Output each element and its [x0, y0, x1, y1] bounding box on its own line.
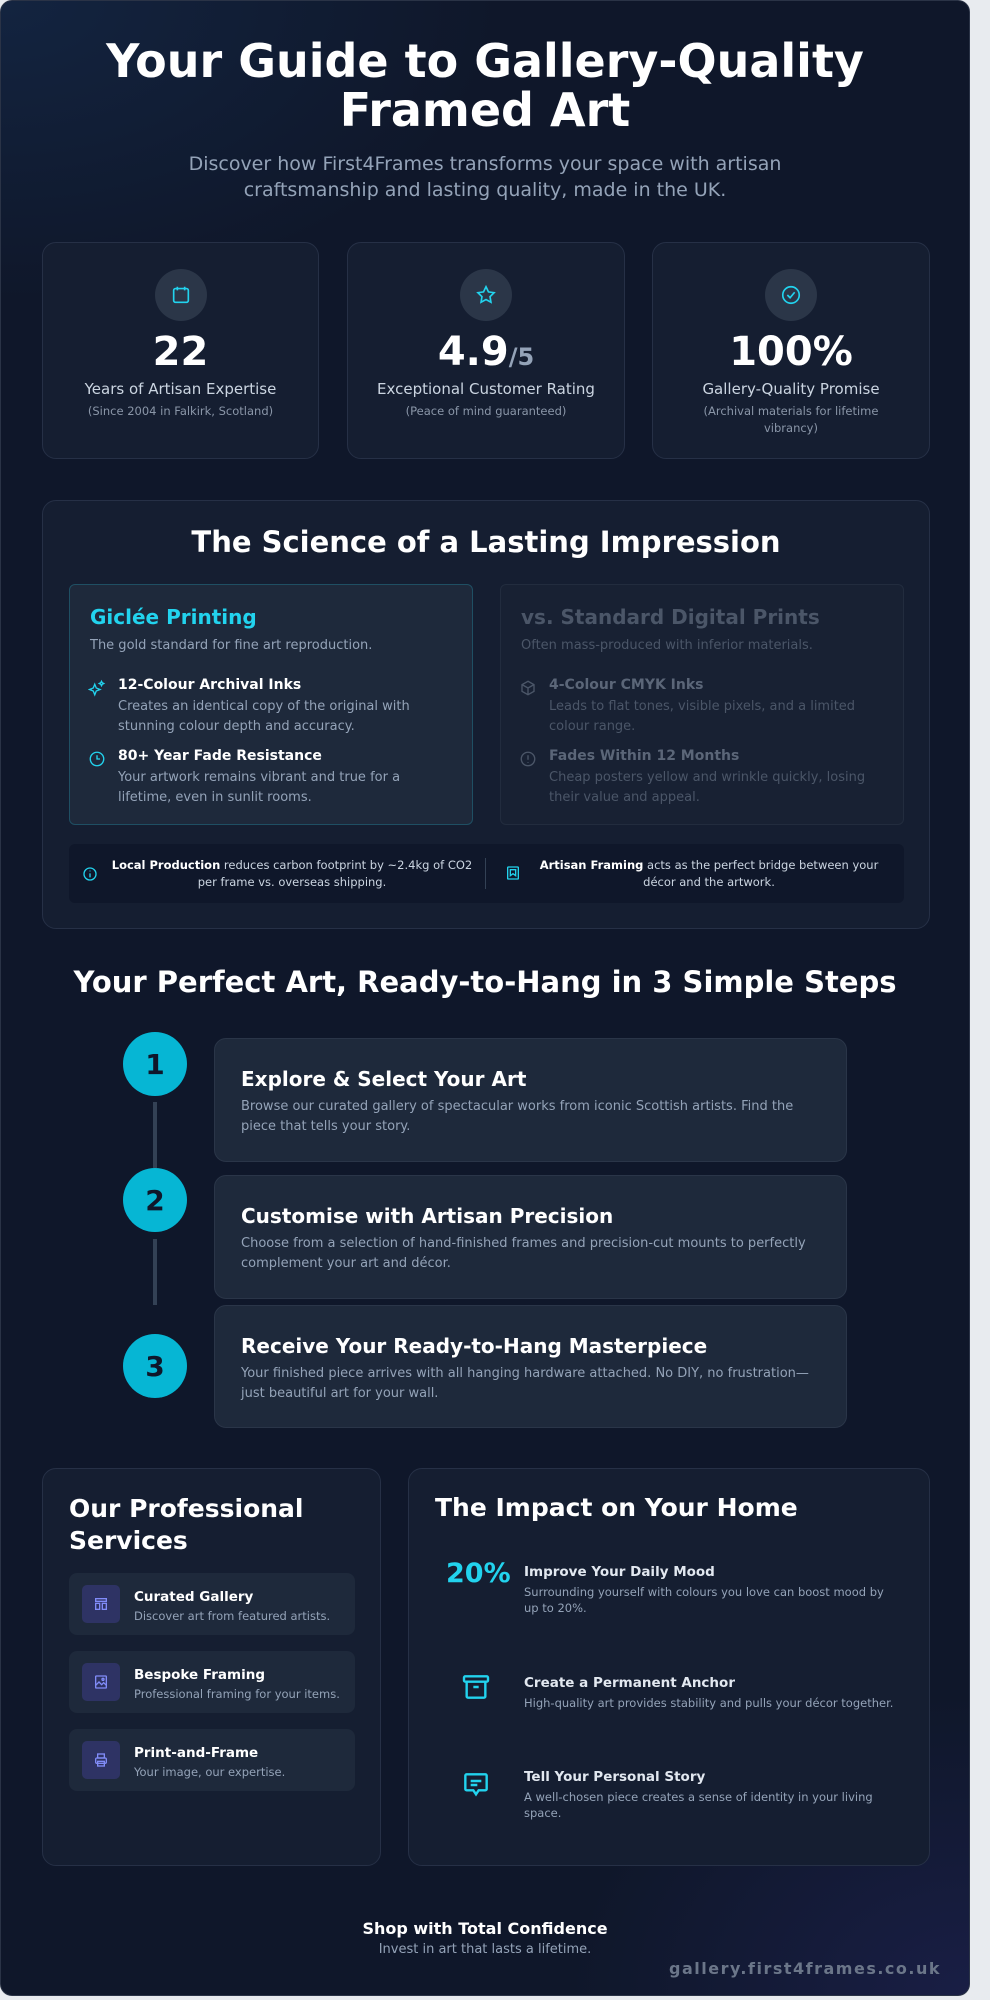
service: framing — [69, 1651, 355, 1713]
heading: steps: Your Perfect Art, Ready-to-Hang in 3 Simple Steps — [73, 965, 897, 999]
strip: local & framing: Local Production reduces carbon footprint by ~2.4kg of CO2 per frame vs. overseas shipping. — [112, 858, 472, 889]
title — [106, 34, 864, 137]
stat card: promise — [652, 242, 930, 459]
subtitle: craftsmanship and lasting quality, made in the UK. — [244, 179, 726, 201]
subtitle: Discover how First4Frames transforms your space with artisan — [189, 153, 781, 175]
stat card: years: (Since 2004 in Falkirk, Scotland) — [88, 404, 273, 418]
step 1 card: Browse our curated gallery of spectacular works from iconic Scottish artists. Find the piece that tells your story. — [241, 1099, 793, 1134]
impact: story: A well-chosen piece creates a sense of identity in your living space. — [524, 1790, 873, 1820]
step 1 card — [214, 1038, 847, 1162]
service: gallery — [69, 1573, 355, 1635]
service: gallery: Discover art from featured artists. — [134, 1609, 330, 1623]
title: Your Guide to Gallery-Quality — [106, 34, 864, 88]
step 1 circle — [123, 1032, 187, 1096]
box: standard: Often mass-produced with inferior materials. — [521, 638, 813, 653]
heading: impact: The Impact on Your Home — [435, 1493, 798, 1522]
service: print — [69, 1729, 355, 1791]
service: framing: Bespoke Framing — [134, 1667, 265, 1683]
item: fade: Your artwork remains vibrant and true for a lifetime, even in sunlit rooms. — [118, 770, 400, 804]
icon: star — [460, 269, 512, 321]
title: Framed Art — [340, 83, 630, 137]
item: inks: 12-Colour Archival Inks — [118, 677, 301, 693]
impact: anchor: High-quality art provides stability and pulls your décor together. — [524, 1696, 893, 1710]
item: cmyk — [521, 677, 855, 734]
impact: mood: Surrounding yourself with colours you love can boost mood by up to 20%. — [524, 1585, 884, 1615]
stat card: years — [42, 242, 319, 459]
strip: local & framing: Artisan Framing acts as the perfect bridge between your décor and the artwork. — [540, 858, 878, 889]
step 2 circle: 2 — [145, 1184, 165, 1216]
item: fade — [90, 748, 400, 804]
panel: impact: 20% — [446, 1558, 511, 1589]
service: print: Print-and-Frame — [134, 1745, 258, 1761]
service: framing: Professional framing for your items. — [134, 1687, 340, 1701]
footer: Shop with Total Confidence — [362, 1919, 608, 1938]
item: cmyk: 4-Colour CMYK Inks — [549, 677, 704, 693]
stat card: years: 22 — [153, 329, 208, 375]
impact: anchor: Create a Permanent Anchor — [524, 1675, 735, 1691]
step 3 card — [214, 1305, 847, 1428]
item: fade: 80+ Year Fade Resistance — [118, 748, 322, 764]
item: cmyk: Leads to flat tones, visible pixels, and a limited colour range. — [549, 699, 855, 734]
heading: services: Services — [69, 1526, 188, 1555]
item: fades: Cheap posters yellow and wrinkle quickly, losing their value and appeal. — [549, 770, 865, 804]
service: print: Your image, our expertise. — [134, 1765, 285, 1779]
icon: calendar — [154, 269, 206, 321]
box: giclee: Giclée Printing — [90, 605, 257, 629]
step 1 circle: 1 — [145, 1048, 165, 1080]
step 3 circle: 3 — [145, 1350, 165, 1382]
box: standard — [500, 584, 904, 825]
heading: services: Our Professional — [69, 1494, 304, 1523]
heading: services — [69, 1494, 304, 1555]
stat card: rating: 4.9/5 — [438, 329, 534, 375]
service: gallery: Curated Gallery — [134, 1589, 253, 1605]
stat card: rating: (Peace of mind guaranteed) — [406, 404, 566, 418]
box: standard: vs. Standard Digital Prints — [521, 605, 820, 629]
impact: mood: Improve Your Daily Mood — [524, 1564, 715, 1580]
connector lines — [153, 1102, 157, 1168]
impact: story — [464, 1769, 873, 1820]
step 3 card: Receive Your Ready-to-Hang Masterpiece — [241, 1334, 707, 1358]
step 2 circle — [123, 1168, 187, 1232]
icon: info — [83, 867, 97, 881]
panel: science — [42, 500, 930, 929]
stat card: promise: (Archival materials for lifetime vibrancy) — [704, 404, 878, 435]
panel: impact — [408, 1468, 930, 1866]
impact: mood — [446, 1558, 884, 1615]
step 2 card: Choose from a selection of hand-finished frames and precision-cut mounts to perfectly complement your art and décor. — [241, 1236, 806, 1271]
heading: science: The Science of a Lasting Impression — [191, 525, 781, 559]
subtitle — [189, 153, 781, 201]
step 3 card: Your finished piece arrives with all hanging hardware attached. No DIY, no frustration—just beautiful art for your wall. — [241, 1366, 809, 1401]
step 1 card: Explore & Select Your Art — [241, 1067, 526, 1091]
strip: local & framing — [69, 844, 904, 903]
item: inks: Creates an identical copy of the original with stunning colour depth and accuracy. — [118, 699, 410, 734]
stat card: promise: 100% — [729, 329, 853, 375]
step 2 card — [214, 1175, 847, 1299]
stat card: rating: Exceptional Customer Rating — [377, 380, 595, 398]
stat card: promise: Gallery-Quality Promise — [702, 380, 880, 398]
step 2 card: Customise with Artisan Precision — [241, 1204, 613, 1228]
item: inks — [88, 677, 410, 734]
item: fades — [520, 748, 865, 804]
stat card: rating — [347, 242, 625, 459]
item: fades: Fades Within 12 Months — [549, 748, 739, 764]
stat card: years: Years of Artisan Expertise — [85, 380, 276, 398]
box: giclee — [69, 584, 473, 825]
footer — [362, 1919, 608, 1957]
impact: anchor — [462, 1675, 893, 1710]
impact: story: Tell Your Personal Story — [524, 1769, 705, 1785]
step 3 circle — [123, 1334, 187, 1398]
box: giclee: The gold standard for fine art reproduction. — [90, 638, 372, 653]
icon: frame — [507, 866, 519, 880]
icon: check — [765, 269, 817, 321]
panel: services — [42, 1468, 381, 1866]
footer: Invest in art that lasts a lifetime. — [379, 1942, 591, 1957]
url: gallery.first4frames.co.uk — [669, 1959, 941, 1978]
